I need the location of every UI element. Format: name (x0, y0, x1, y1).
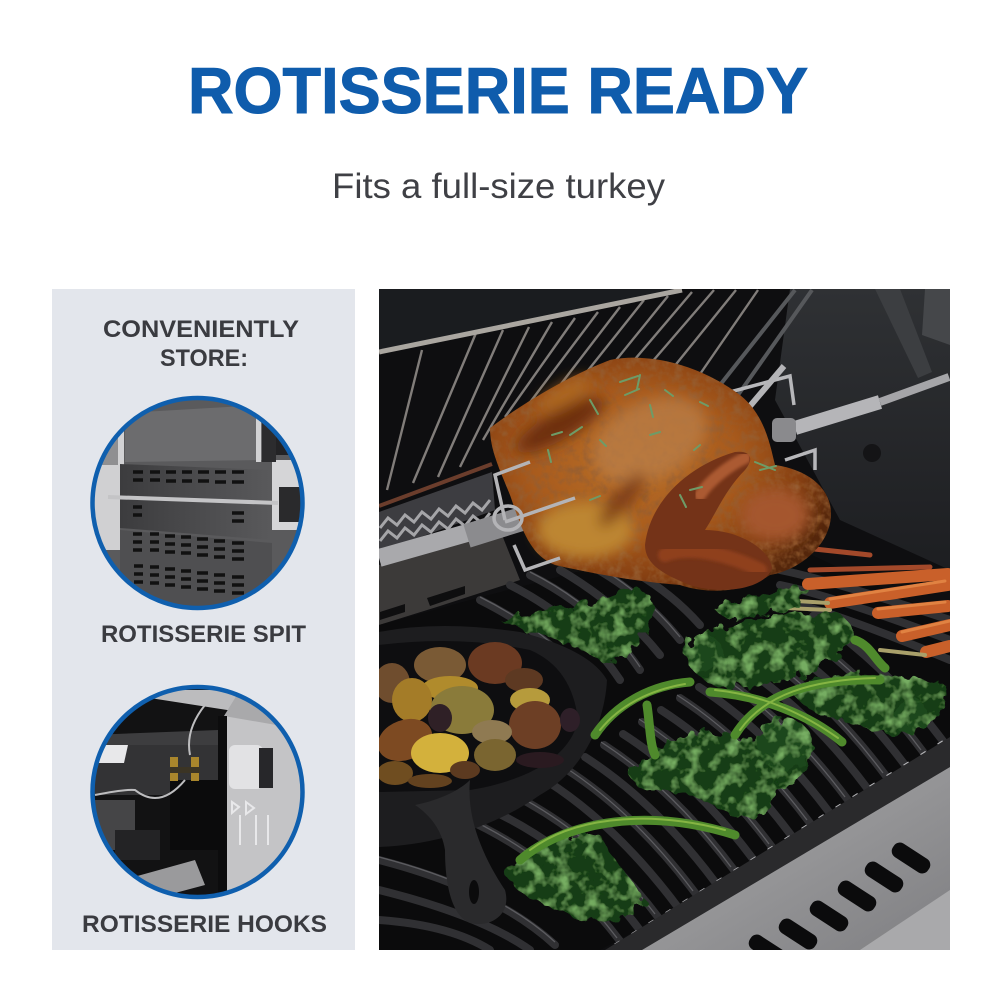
cast iron skillet with potatoes (372, 626, 607, 924)
title and subtitle (188, 54, 808, 206)
herbs (548, 375, 776, 507)
skillet handle (415, 780, 506, 924)
chevron burner shield (379, 472, 520, 625)
carrots (782, 548, 950, 655)
turkey wing (645, 452, 772, 590)
heading: conveniently store: STORE: (160, 345, 248, 372)
stainless front fascia (605, 737, 950, 968)
label: rotisserie hooks: ROTISSERIE HOOKS (82, 911, 327, 938)
title: ROTISSERIE READY (188, 54, 808, 127)
grill grates (379, 540, 950, 950)
image: rotisserie hooks (90, 685, 305, 905)
turkey (490, 358, 831, 591)
broccolini greens (500, 589, 946, 921)
back warming rack (379, 290, 812, 506)
background: grill interior (379, 289, 950, 950)
panel: conveniently store (52, 289, 355, 950)
heading: conveniently store (103, 316, 299, 372)
turkey skin texture (490, 358, 831, 591)
turkey highlights (510, 371, 809, 558)
spit rod and forks (379, 366, 949, 558)
potatoes (372, 642, 580, 788)
leafy masses (500, 589, 946, 921)
photo: turkey on rotisserie over grill (379, 289, 950, 950)
image: rotisserie spit (90, 395, 310, 610)
heading: conveniently store: CONVENIENTLY (103, 316, 299, 343)
stems (520, 640, 885, 860)
subtitle: Fits a full-size turkey (332, 167, 666, 206)
front fork (494, 462, 575, 570)
label: rotisserie spit: ROTISSERIE SPIT (101, 621, 306, 648)
